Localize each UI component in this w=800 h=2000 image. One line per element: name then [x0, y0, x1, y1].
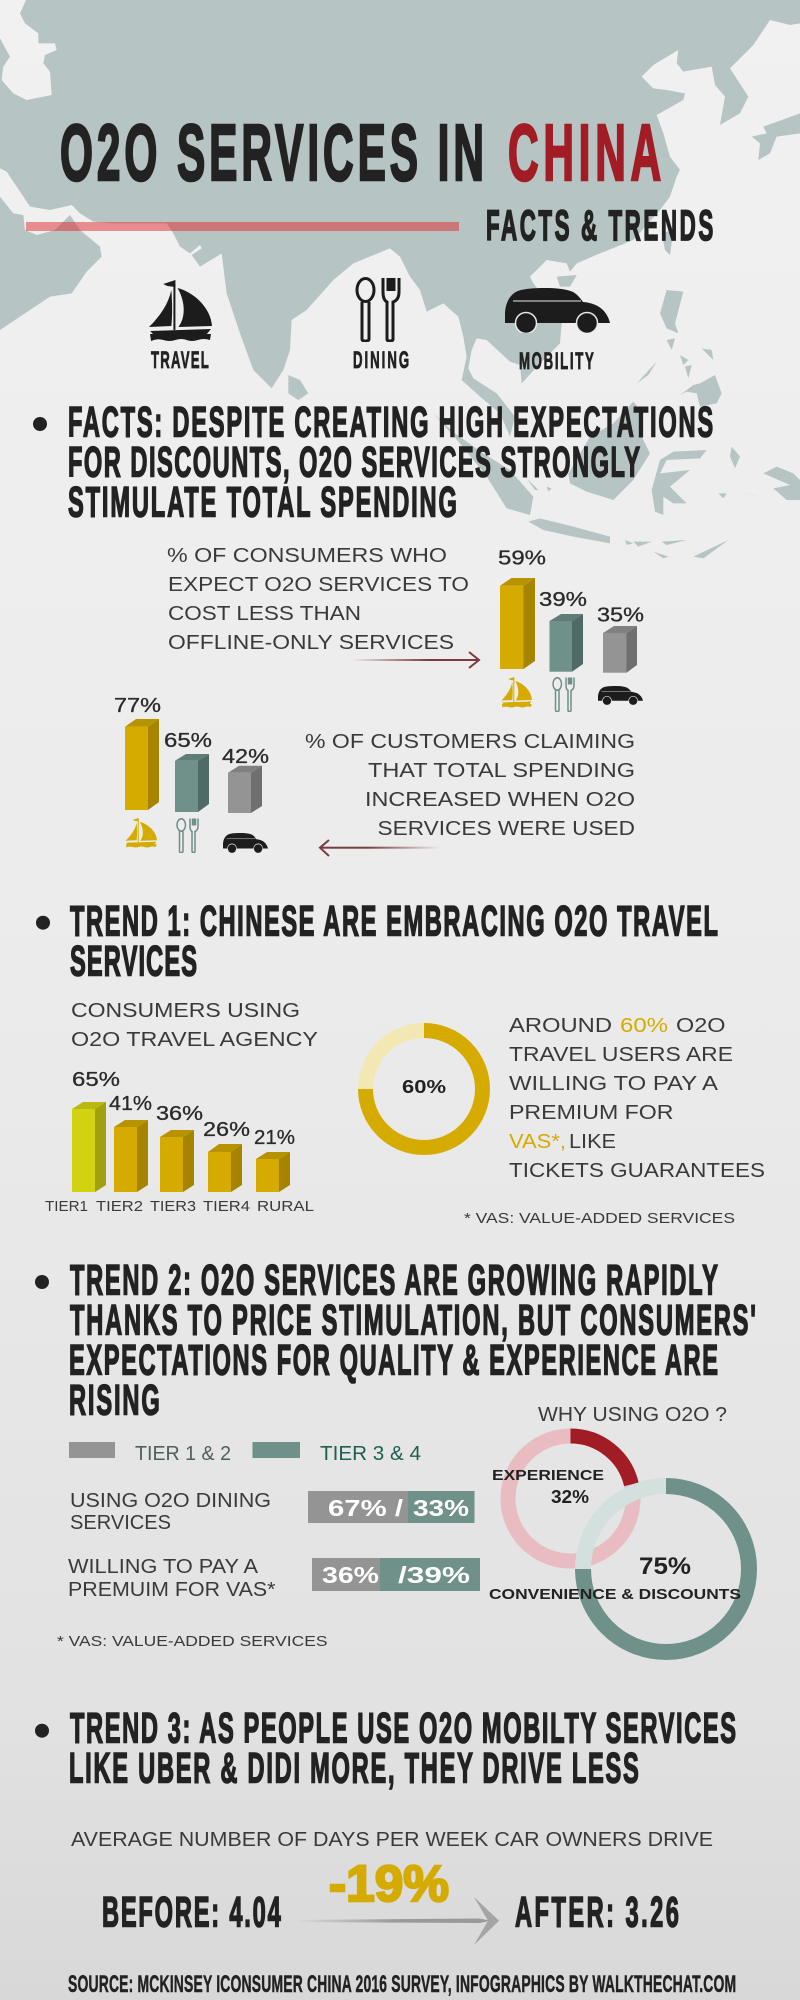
bar chart: travel agency by tier: 21%	[254, 1126, 295, 1149]
heading: trend 2: THANKS TO PRICE STIMULATION, BUT CONSUMERS'	[70, 1297, 756, 1344]
ring chart: experience	[508, 1436, 633, 1561]
before value: BEFORE: 4.04	[102, 1889, 281, 1936]
bar chart: travel agency by tier: TIER1	[45, 1198, 88, 1215]
text: premium for value-added services: WILLING TO PAY A	[509, 1073, 719, 1095]
text: consumers expecting lower cost	[167, 545, 469, 654]
bar chart: expect lower cost: 59%	[498, 547, 546, 570]
bar chart: travel agency by tier: 36%	[156, 1102, 203, 1125]
heading: facts: FACTS: DESPITE CREATING HIGH EXPECTATIONS	[68, 399, 713, 446]
bar chart: travel agency by tier	[45, 1068, 314, 1215]
heading: trend 2: TREND 2: O2O SERVICES ARE GROWING RAPIDLY	[70, 1257, 718, 1304]
source line: SOURCE: MCKINSEY ICONSUMER CHINA 2016 SURVEY, INFOGRAPHICS BY WALKTHECHAT.COM	[68, 1971, 736, 1998]
legend: tiers: TIER 3 & 4	[320, 1443, 421, 1465]
map of Asia	[0, 0, 800, 558]
row: using O2O dining services: 67% /	[328, 1495, 404, 1521]
text: customers claiming spending increase: THAT TOTAL SPENDING	[368, 760, 635, 782]
bar chart: expect lower cost: 35%	[597, 604, 644, 627]
text: premium for value-added services: O2O	[676, 1015, 726, 1037]
bar chart: total spending increased	[114, 694, 269, 853]
text: premium for value-added services: VAS*,	[509, 1131, 566, 1153]
label: mobility: MOBILITY	[519, 348, 594, 375]
label: convenience and discounts 75%	[489, 1553, 741, 1603]
label: experience 32%: EXPERIENCE	[492, 1467, 604, 1484]
text: premium for value-added services: TRAVEL USERS ARE	[509, 1044, 733, 1066]
label: experience 32%: 32%	[551, 1487, 589, 1507]
icon: mobility car	[505, 288, 610, 334]
title: CHINA	[508, 108, 661, 197]
text: premium for value-added services: TICKETS GUARANTEES	[509, 1160, 765, 1182]
ring chart: convenience and discounts	[583, 1486, 749, 1652]
row: willing to pay premium: PREMUIM FOR VAS*	[68, 1579, 276, 1601]
text: consumers using travel agency	[71, 1000, 318, 1051]
donut chart: 60%	[366, 1030, 483, 1148]
bar chart: travel agency by tier: 26%	[203, 1118, 250, 1141]
icon: dining spoon and fork	[357, 278, 399, 341]
row: using O2O dining services: SERVICES	[70, 1512, 171, 1534]
text: premium for value-added services: LIKE	[569, 1131, 616, 1153]
legend: tiers	[69, 1442, 421, 1465]
heading: facts: FOR DISCOUNTS, O2O SERVICES STRONGLY	[68, 439, 640, 486]
donut chart: 60%: 60%	[402, 1077, 446, 1097]
label: experience 32%	[492, 1467, 604, 1507]
title: O2O SERVICES IN	[60, 108, 484, 197]
heading: trend 1	[36, 898, 718, 985]
text: customers claiming spending increase	[305, 731, 635, 840]
heading: why using O2O: WHY USING O2O ?	[538, 1404, 727, 1426]
arrow: before to after	[295, 1897, 499, 1945]
bar chart: travel agency by tier: RURAL	[257, 1198, 314, 1215]
text: consumers expecting lower cost: % OF CONSUMERS WHO	[167, 545, 447, 567]
heading: facts: STIMULATE TOTAL SPENDING	[68, 479, 457, 526]
text: premium for value-added services: AROUND	[509, 1015, 612, 1037]
text: premium for value-added services: 60%	[620, 1015, 668, 1037]
row: willing to pay premium	[68, 1556, 480, 1601]
subtitle: FACTS & TRENDS	[486, 202, 713, 250]
heading: trend 3: LIKE UBER & DIDI MORE, THEY DRIVE LESS	[69, 1745, 639, 1792]
arrow: to second bar chart	[320, 840, 440, 856]
footnote: VAS: * VAS: VALUE-ADDED SERVICES	[57, 1633, 328, 1650]
text: consumers expecting lower cost: OFFLINE-ONLY SERVICES	[168, 632, 454, 654]
bar chart: travel agency by tier: TIER3	[150, 1198, 196, 1215]
row: willing to pay premium: WILLING TO PAY A	[68, 1556, 259, 1578]
row: using O2O dining services: 33%	[413, 1495, 469, 1521]
text: consumers expecting lower cost: COST LESS THAN	[168, 603, 361, 625]
label: dining: DINING	[353, 347, 409, 374]
heading: trend 1: TREND 1: CHINESE ARE EMBRACING O2O TRAVEL	[70, 898, 718, 945]
icon: travel sailboat	[149, 280, 212, 341]
text: customers claiming spending increase: % OF CUSTOMERS CLAIMING	[305, 731, 635, 753]
heading: trend 2: EXPECTATIONS FOR QUALITY & EXPERIENCE ARE	[69, 1337, 718, 1384]
bar chart: total spending increased: 42%	[222, 745, 269, 768]
text: premium for value-added services: PREMIUM FOR	[509, 1102, 674, 1124]
text: consumers using travel agency: CONSUMERS USING	[71, 1000, 300, 1022]
heading: trend 1: SERVICES	[70, 938, 197, 985]
bar chart: expect lower cost: 39%	[539, 588, 587, 611]
text: consumers expecting lower cost: EXPECT O2O SERVICES TO	[168, 574, 469, 596]
title underline bar	[26, 222, 459, 231]
heading: trend 2	[35, 1257, 756, 1424]
row: willing to pay premium: /39%	[398, 1562, 470, 1588]
footnote: VAS: * VAS: VALUE-ADDED SERVICES	[464, 1210, 735, 1227]
text: consumers using travel agency: O2O TRAVEL AGENCY	[71, 1029, 318, 1051]
bar chart: travel agency by tier: TIER4	[203, 1198, 250, 1215]
bar chart: travel agency by tier: TIER2	[96, 1198, 143, 1215]
bar chart: expect lower cost	[498, 547, 644, 711]
legend: tiers: TIER 1 & 2	[135, 1443, 231, 1465]
label: convenience and discounts 75%: 75%	[639, 1553, 691, 1580]
heading: trend 3: TREND 3: AS PEOPLE USE O2O MOBILTY SERVICES	[70, 1705, 736, 1752]
bar chart: travel agency by tier: 65%	[72, 1068, 120, 1091]
bar chart: travel agency by tier: 41%	[109, 1092, 152, 1115]
bar chart: total spending increased: 77%	[114, 694, 161, 717]
heading: trend 3	[35, 1705, 736, 1792]
row: using O2O dining services: USING O2O DINING	[70, 1490, 271, 1512]
bar chart: total spending increased: 65%	[164, 729, 212, 752]
label: convenience and discounts 75%: CONVENIENCE & DISCOUNTS	[489, 1586, 741, 1603]
callout: minus 19%: -19%	[329, 1855, 449, 1912]
after value: AFTER: 3.26	[515, 1889, 679, 1936]
text: customers claiming spending increase: INCREASED WHEN O2O	[365, 789, 635, 811]
row: using O2O dining services	[70, 1490, 474, 1534]
text: customers claiming spending increase: SERVICES WERE USED	[378, 818, 635, 840]
heading: trend 2: RISING	[69, 1377, 160, 1424]
heading: facts	[33, 399, 713, 526]
text: premium for value-added services	[509, 1015, 765, 1182]
row: willing to pay premium: 36%	[322, 1562, 379, 1588]
label: travel: TRAVEL	[151, 347, 209, 374]
text: average days per week: AVERAGE NUMBER OF DAYS PER WEEK CAR OWNERS DRIVE	[71, 1829, 713, 1851]
arrow: to first bar chart	[352, 652, 479, 668]
